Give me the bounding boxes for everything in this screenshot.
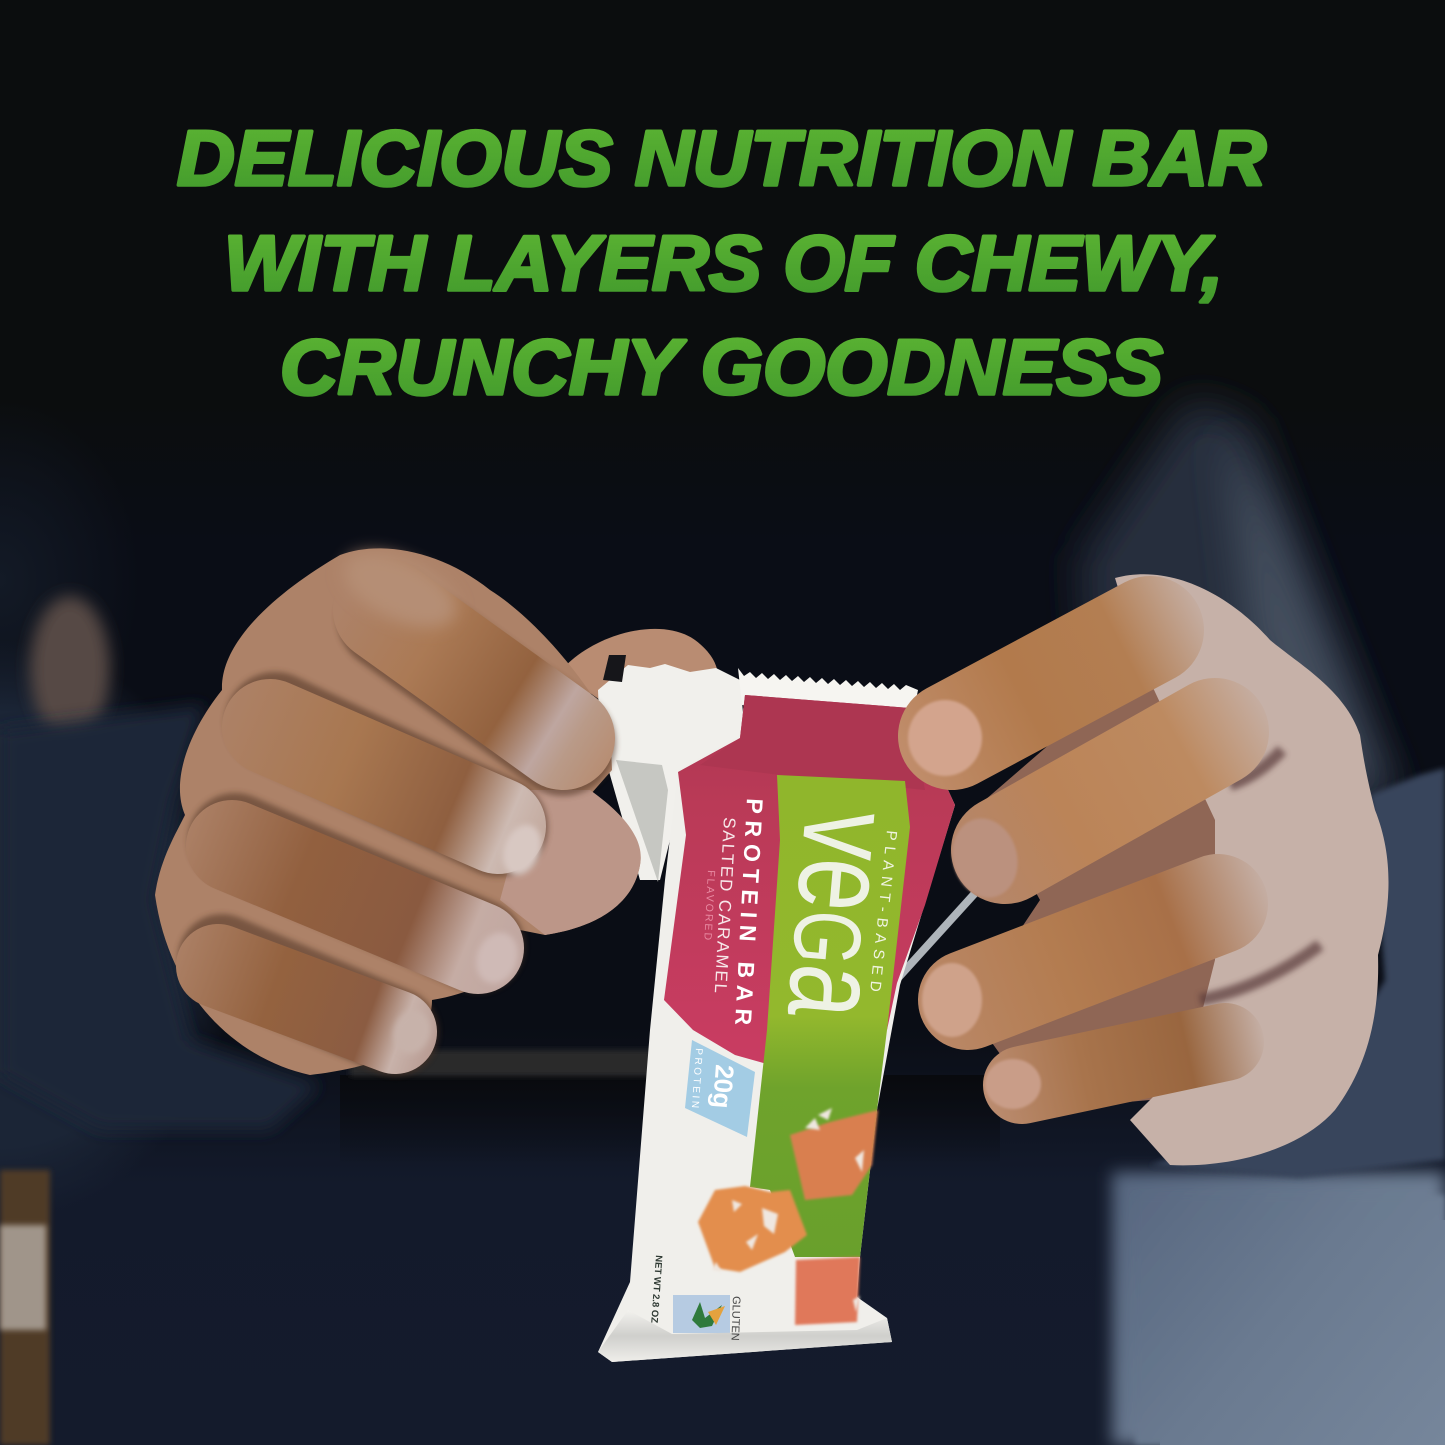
right hand <box>908 574 1389 1165</box>
heading line 2: WITH LAYERS OF CHEWY, <box>224 219 1223 307</box>
left top knuckle <box>333 537 467 643</box>
gluten free note: GLUTEN <box>728 1296 742 1341</box>
finger 2 <box>270 722 498 827</box>
serrated edge <box>738 668 918 720</box>
bar label text <box>648 798 922 1341</box>
left hand <box>155 537 641 1075</box>
heading line 3: CRUNCHY GOODNESS <box>280 323 1163 411</box>
caramel pieces <box>698 1110 878 1325</box>
red band <box>664 695 955 1064</box>
black notch on flap <box>603 655 626 682</box>
wrapper white body <box>598 695 955 1362</box>
left nails <box>388 819 548 1059</box>
heading: three lines of green italic text <box>177 114 1266 411</box>
icon: protein bar wrapper <box>598 695 955 1362</box>
non-gmo mark <box>673 1295 730 1333</box>
product name: PROTEIN BAR <box>730 798 768 1026</box>
thumb <box>952 630 1150 736</box>
left palm <box>500 790 641 935</box>
inner shadow between fingers <box>985 640 1260 1110</box>
left sleeve <box>0 705 320 1130</box>
protein badge: 20g <box>707 1064 740 1110</box>
flavor: SALTED CARAMEL <box>711 817 739 994</box>
left hand back finger behind wrapper <box>560 629 718 700</box>
right side white panel <box>897 884 985 985</box>
wrapper: torn back flap <box>598 655 918 882</box>
brand name: veGa <box>759 806 922 1025</box>
right nails <box>908 700 1041 1109</box>
finger 4 <box>1022 1042 1225 1085</box>
green stripe <box>750 775 910 1257</box>
20g badge <box>685 1040 755 1137</box>
plant-based line: PLANT-BASED <box>866 830 900 993</box>
right sleeve <box>1150 768 1445 1178</box>
heading line 1: DELICIOUS NUTRITION BAR <box>177 114 1266 202</box>
salt crystals <box>712 1108 864 1312</box>
dark knuckle crease <box>1200 750 1320 1000</box>
finger 2 <box>1005 732 1215 850</box>
flavored note: FLAVORED <box>701 870 717 941</box>
left hand base <box>155 548 641 1075</box>
net weight: NET WT 2.8 OZ <box>648 1255 664 1324</box>
crimp shadow <box>598 1310 892 1362</box>
finger 4 <box>218 958 395 1032</box>
finger 1 <box>385 610 563 743</box>
finger 3 <box>232 840 478 948</box>
protein badge label: PROTEIN <box>689 1048 704 1108</box>
back of right hand <box>1115 574 1389 1165</box>
finger 3 <box>968 904 1218 1000</box>
